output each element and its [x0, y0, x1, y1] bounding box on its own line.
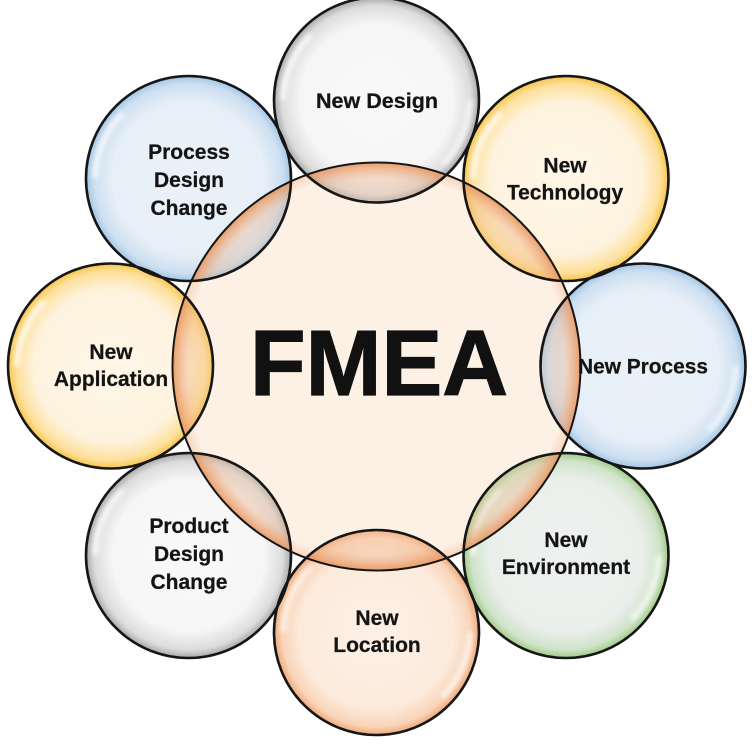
central circle: [172, 162, 580, 570]
label: New Process: New Process: [578, 356, 708, 378]
bubble: New Environment: [464, 453, 668, 658]
label: Product Design Change: Design: [154, 543, 224, 566]
label: Process Design Change: Design: [154, 169, 224, 192]
label: New Location: Location: [333, 634, 421, 657]
overlap lenses between central circle and bubbles: [172, 162, 580, 570]
label: Product Design Change: Change: [150, 571, 228, 594]
label: Process Design Change: Process: [148, 141, 230, 164]
title: FMEA: FMEA: [250, 311, 508, 415]
label: Process Design Change: Change: [150, 197, 228, 220]
bubble: New Design: [274, 0, 479, 202]
bubble: New Technology: [464, 76, 668, 281]
bubble: New Location: [274, 530, 479, 735]
label: New Environment: New: [544, 529, 588, 552]
bubble: New Process: [540, 264, 746, 468]
label: New Application: New: [89, 341, 133, 364]
bubble: New Application: [8, 264, 213, 468]
label: New Application: Application: [54, 368, 168, 391]
label: New Technology: Technology: [507, 182, 623, 204]
label: New Location: New: [355, 607, 399, 630]
bubble: Process Design Change: [86, 76, 291, 281]
label: Product Design Change: Product: [149, 515, 229, 538]
label: New Technology: New: [543, 154, 587, 178]
bubble: Product Design Change: [86, 453, 291, 658]
label: New Environment: Environment: [502, 556, 630, 579]
label: New Design: New Design: [316, 90, 438, 113]
